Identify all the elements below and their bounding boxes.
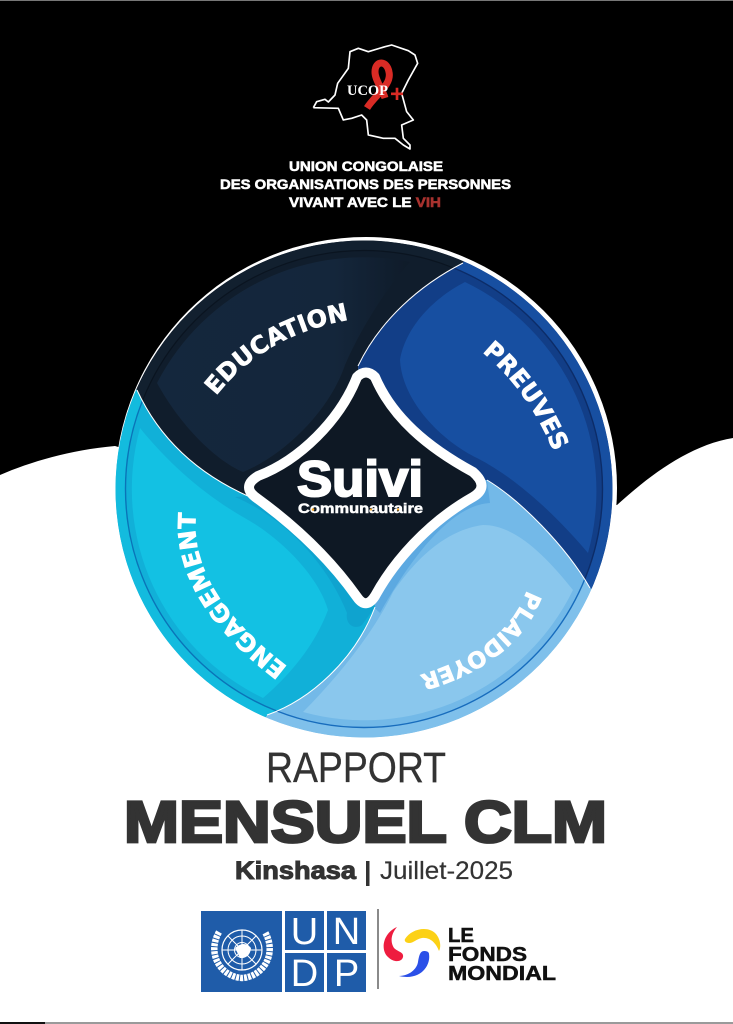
separator bar bbox=[366, 861, 370, 886]
UNDP letters bbox=[291, 911, 360, 995]
logo: UCOP+ bbox=[313, 45, 418, 149]
centre diamond bbox=[249, 372, 482, 603]
centre subtitle: Communautaire bbox=[298, 501, 424, 516]
wheel segments bbox=[116, 240, 612, 738]
black wave header bbox=[0, 1, 733, 520]
UCOP wordmark: UCOP bbox=[347, 83, 388, 99]
line 1: UNION CONGOLAISE bbox=[289, 159, 443, 174]
white rim bbox=[115, 237, 617, 739]
tile D bbox=[285, 953, 324, 992]
segment: education bbox=[136, 240, 464, 495]
top page edge bbox=[0, 0, 733, 1]
date: Juillet-2025 bbox=[380, 857, 513, 885]
bottom page edge bbox=[0, 1022, 733, 1024]
label: plaidoyer: PLAIDOYER bbox=[420, 592, 542, 690]
tile P bbox=[327, 953, 366, 992]
mensuel clm: MENSUEL CLM bbox=[124, 790, 607, 855]
line 2: DES ORGANISATIONS DES PERSONNES bbox=[220, 177, 511, 192]
label: preuves: PREUVES bbox=[483, 340, 568, 449]
emblem tile bbox=[201, 911, 282, 992]
red ribbon bbox=[367, 63, 389, 108]
plus sign: + bbox=[390, 81, 404, 108]
segment: preuves bbox=[358, 261, 612, 589]
location: Kinshasa bbox=[235, 857, 357, 885]
segment: engagement bbox=[116, 390, 375, 718]
tile N bbox=[327, 911, 366, 950]
fund name: FONDS bbox=[448, 944, 527, 966]
UN emblem bbox=[214, 930, 270, 978]
UNDP letters: P bbox=[334, 953, 359, 995]
logo: UNDP bbox=[201, 911, 366, 995]
red swirl bbox=[384, 927, 403, 961]
centre title: Suivi bbox=[297, 451, 423, 507]
rapport: RAPPORT bbox=[266, 744, 446, 792]
logos divider bbox=[377, 909, 379, 989]
circular diagram bbox=[116, 237, 617, 738]
fund name bbox=[448, 925, 556, 985]
fund name: MONDIAL bbox=[448, 963, 556, 985]
map outline of DRC bbox=[313, 45, 418, 149]
UNDP letters: D bbox=[291, 953, 318, 995]
UNDP letters: N bbox=[333, 911, 360, 953]
label: engagement: ENGAGEMENT bbox=[177, 512, 286, 680]
label: education: EDUCATION bbox=[204, 302, 347, 395]
segment: plaidoyer bbox=[266, 480, 592, 738]
organisation name bbox=[220, 159, 511, 210]
segment separators bbox=[137, 263, 590, 715]
report title bbox=[124, 744, 607, 886]
logo: Le Fonds Mondial bbox=[384, 925, 556, 985]
blue swirl bbox=[399, 951, 429, 977]
yellow swirl bbox=[405, 929, 440, 951]
tile U bbox=[285, 911, 324, 950]
fund name: LE bbox=[448, 925, 474, 947]
line 3: VIVANT AVEC LE VIH bbox=[289, 195, 441, 210]
UNDP letters: U bbox=[291, 911, 318, 953]
